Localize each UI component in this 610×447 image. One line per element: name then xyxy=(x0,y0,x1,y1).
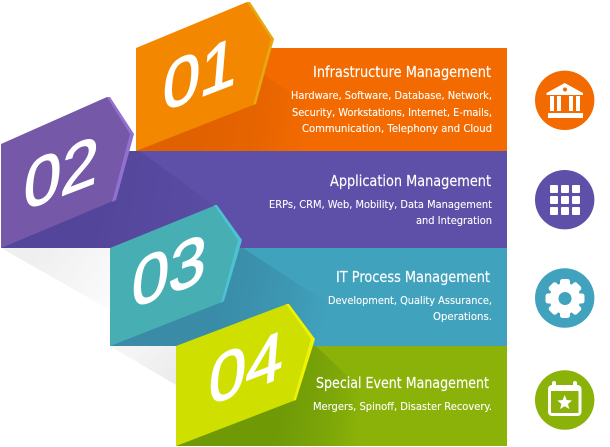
number 04: 04 xyxy=(206,315,287,421)
number 03: 03 xyxy=(129,218,210,324)
tag 01 xyxy=(136,2,274,151)
panel: it process xyxy=(110,248,507,346)
icon: bank xyxy=(535,71,594,130)
heading: Special Event Management: Special Event Management xyxy=(316,374,489,392)
text: IT process details: Operations. xyxy=(433,310,492,323)
text: application details: and Integration xyxy=(416,214,492,227)
icon: calendar xyxy=(535,370,594,430)
shadow: below 02 xyxy=(1,248,110,310)
heading: Application Management: Application Management xyxy=(330,172,491,190)
text: special event details: Mergers, Spinoff, Disaster Recovery. xyxy=(313,400,492,413)
text: IT process details xyxy=(328,294,492,323)
fold shadow 01 xyxy=(136,75,310,151)
number 01: 01 xyxy=(160,21,241,127)
tag 02 xyxy=(1,97,134,248)
fold shadow 02 xyxy=(1,151,240,248)
text: infrastructure details: Security, Workstations, Internet, E-mails, xyxy=(292,106,492,119)
number 02: 02 xyxy=(21,120,102,226)
tag 04 xyxy=(176,304,315,446)
text: infrastructure details: Communication, Telephony and Cloud xyxy=(302,122,492,135)
panel: application xyxy=(1,151,507,248)
text: IT process details: Development, Quality Assurance, xyxy=(328,294,492,307)
fold shadow 03 xyxy=(110,248,330,346)
icon: gear xyxy=(535,268,594,328)
text: infrastructure details: Hardware, Software, Database, Network, xyxy=(291,89,492,102)
fold shadow 04 xyxy=(176,346,362,446)
panel: infrastructure xyxy=(136,48,507,151)
text: infrastructure details xyxy=(291,89,492,135)
text: application details xyxy=(269,198,493,227)
shadow: below 03 xyxy=(110,346,176,385)
heading: Infrastructure Management: Infrastructure Management xyxy=(313,63,491,81)
icon: grid xyxy=(535,170,594,229)
text: application details: ERPs, CRM, Web, Mobility, Data Management xyxy=(269,198,493,211)
heading: IT Process Management: IT Process Management xyxy=(336,268,490,286)
tag 03 xyxy=(110,205,242,346)
panel: special event xyxy=(176,346,507,446)
